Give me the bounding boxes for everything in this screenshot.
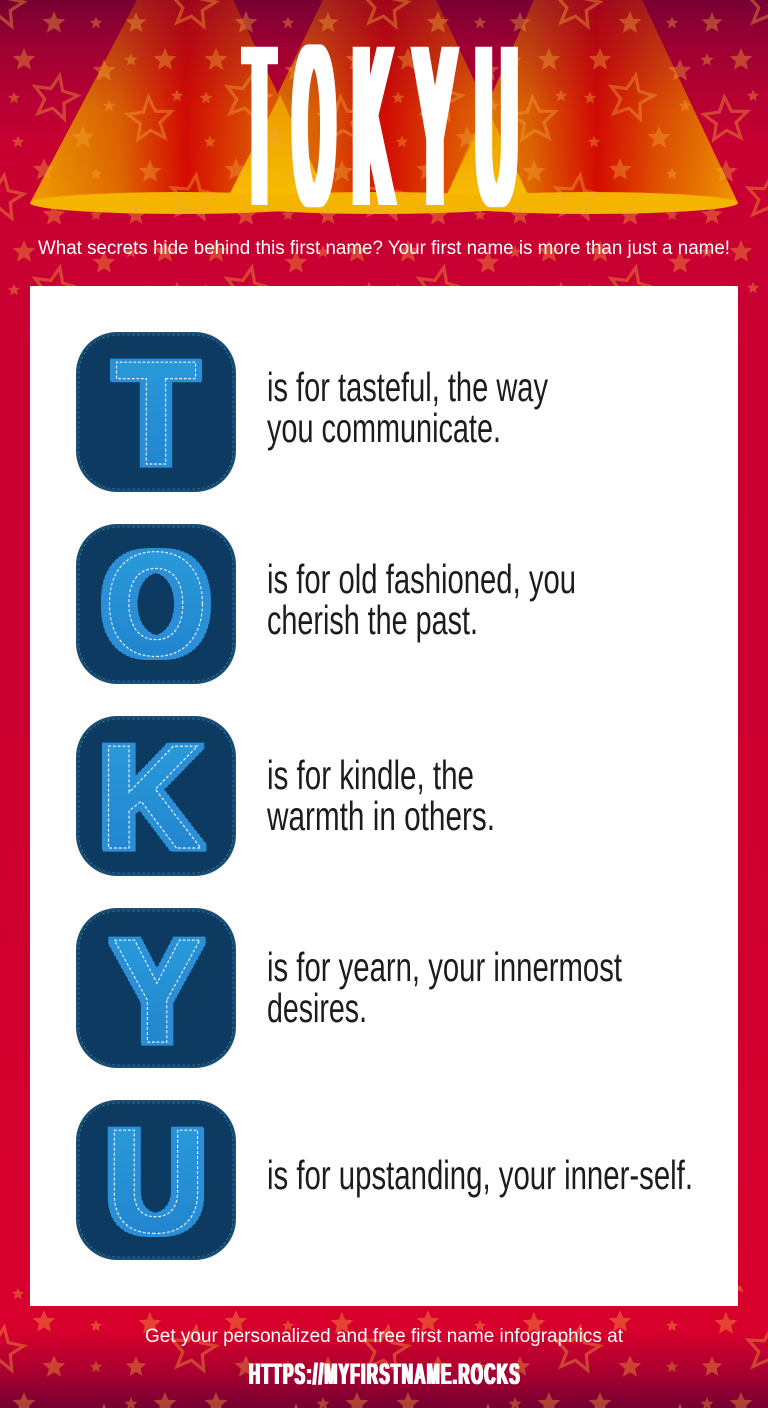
title: K xyxy=(354,0,392,254)
spotlight overlap: right xyxy=(443,110,532,203)
text: K line: is for kindle, the xyxy=(267,752,474,798)
subtitle: What secrets hide behind this first name? Your first name is more than just a name! xyxy=(38,238,730,259)
spotlight base ellipses xyxy=(30,192,738,214)
title: O xyxy=(295,0,333,254)
text: Y line: is for yearn, your innermost xyxy=(267,944,622,990)
row: K xyxy=(77,715,495,880)
text: Y line: desires. xyxy=(267,985,367,1031)
icon: letter U: U xyxy=(106,1099,206,1264)
spotlight overlap: left xyxy=(225,95,330,203)
row: U xyxy=(77,1099,693,1264)
text: O line: cherish the past. xyxy=(267,597,478,643)
icon: letter T: T xyxy=(115,331,197,496)
icon: letter O: O xyxy=(104,522,208,687)
text: T line: is for tasteful, the way xyxy=(267,364,548,410)
title: T xyxy=(246,0,273,254)
star pattern: top xyxy=(0,0,768,298)
star pattern: bottom xyxy=(0,1286,768,1408)
row: O xyxy=(77,522,576,687)
spotlight: right xyxy=(443,0,738,203)
icon: letter Y xyxy=(77,909,235,1074)
spotlights xyxy=(30,0,738,214)
row: T xyxy=(77,331,548,496)
icon: letter U xyxy=(77,1099,235,1264)
footer text: Get your personalized and free first name infographics at xyxy=(145,1326,624,1347)
icon: letter K xyxy=(77,715,235,880)
title: Y xyxy=(415,0,455,254)
icon: letter Y: Y xyxy=(112,909,202,1074)
spotlight: left xyxy=(30,0,330,203)
text: T line: you communicate. xyxy=(267,405,501,451)
icon: letter T xyxy=(77,331,235,496)
row: Y xyxy=(77,909,622,1074)
spotlight: middle xyxy=(225,0,532,203)
text: K line: warmth in others. xyxy=(266,793,495,839)
icon: letter K: K xyxy=(99,715,202,880)
text: O line: is for old fashioned, you xyxy=(267,556,576,602)
white panel xyxy=(30,286,738,1306)
text: U xyxy=(477,0,516,254)
